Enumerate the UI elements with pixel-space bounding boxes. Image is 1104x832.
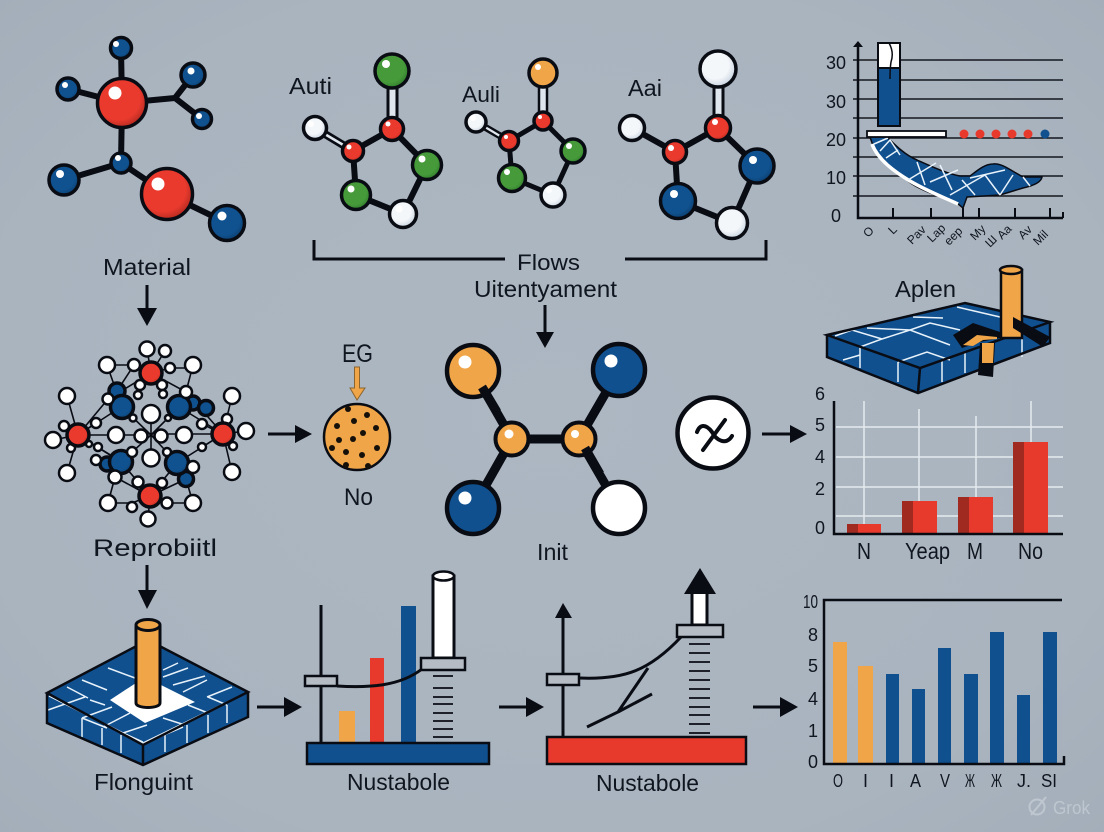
label: Aplen: Aplen — [895, 276, 956, 302]
label: Nustabole 2: Nustabole — [596, 770, 699, 796]
dots — [960, 130, 1050, 138]
icon: slab with pillar and clamps — [827, 266, 1050, 393]
label: Nustabole 1: Nustabole — [347, 769, 450, 795]
bracket — [314, 240, 766, 259]
x axis labels: N — [857, 538, 871, 564]
x axis labels: My — [967, 222, 988, 243]
y axis labels: 8 — [808, 625, 818, 645]
label: Init: Init — [537, 539, 569, 565]
molecule: material — [49, 38, 244, 240]
x axis labels: SI — [1041, 771, 1057, 791]
chart: red bars — [815, 384, 1063, 564]
y axis labels: 10 — [803, 592, 818, 612]
pillar — [136, 620, 160, 708]
arrow: orange down — [350, 367, 365, 400]
arrow: to chart 3 — [499, 697, 544, 717]
label: Aai: Aai — [628, 75, 662, 101]
bars — [847, 442, 1048, 534]
x axis labels: L — [885, 222, 900, 237]
x axis labels: Ж — [991, 771, 1002, 791]
x axis labels: M — [967, 538, 983, 564]
y axis labels: 20 — [826, 130, 846, 150]
x axis labels: O — [860, 224, 877, 240]
wave shape — [870, 137, 1042, 208]
y axis labels: 1 — [808, 721, 818, 741]
label: Flonguint: Flonguint — [94, 769, 194, 795]
y axis labels — [815, 384, 825, 538]
x axis labels: Lap — [924, 221, 949, 245]
icon: Flonguint slab and pillar — [47, 620, 248, 765]
x axis labels — [860, 221, 1051, 250]
y axis labels: 4 — [815, 447, 825, 467]
chart: bottom right bars — [803, 592, 1064, 791]
label: Uitentyament: Uitentyament — [474, 276, 618, 302]
y axis labels — [826, 53, 846, 226]
x axis labels: V — [940, 771, 950, 791]
label: Auti: Auti — [289, 73, 332, 99]
label: Auli: Auli — [462, 82, 500, 107]
y axis labels: 30 — [826, 53, 846, 73]
arrow: Reprobiitl down — [138, 565, 157, 609]
y axis labels: 5 — [815, 415, 825, 435]
arrow: to bar chart — [762, 425, 807, 443]
y axis labels: 6 — [815, 384, 825, 404]
x axis labels: Pav — [904, 223, 929, 247]
label: No: No — [344, 484, 373, 511]
y axis labels — [803, 592, 818, 772]
watermark: Grok: Grok — [1053, 798, 1091, 818]
label: EG: EG — [342, 340, 373, 368]
arrow: material down — [137, 285, 157, 326]
x axis labels: A — [910, 771, 921, 791]
x axis labels: I — [863, 771, 868, 791]
molecule: central — [447, 344, 645, 534]
x axis labels — [833, 771, 1057, 791]
x axis labels: No — [1018, 538, 1043, 564]
label: Flows: Flows — [517, 250, 580, 275]
y axis labels: 10 — [826, 168, 846, 188]
clamps — [953, 317, 1050, 377]
y axis labels: 4 — [808, 689, 818, 709]
x axis labels: I — [889, 771, 894, 791]
x axis labels — [857, 538, 1043, 564]
apparatus: Nustabole blue — [305, 572, 489, 764]
x axis labels: Ш — [982, 232, 1000, 250]
y axis labels: 5 — [808, 656, 818, 676]
x axis labels: eep — [941, 224, 966, 248]
y axis labels: 30 — [826, 92, 846, 112]
y axis labels: 2 — [815, 479, 825, 499]
y axis labels: 0 — [808, 752, 818, 772]
x axis labels: Ж — [965, 771, 975, 791]
white plank — [867, 131, 946, 137]
bars — [833, 632, 1057, 764]
molecule: Aai — [620, 51, 774, 238]
x axis labels: Aa — [994, 222, 1015, 242]
x axis labels: Yeap — [905, 538, 950, 564]
x axis labels: Av — [1015, 222, 1035, 242]
x axis labels: O — [833, 771, 843, 791]
arrow: cluster to particle — [268, 425, 312, 443]
label: Reprobiitl: Reprobiitl — [93, 535, 217, 562]
apparatus: Nustabole red — [547, 568, 746, 764]
arrow: to chart 2 — [257, 697, 302, 717]
label: Material: Material — [103, 254, 191, 280]
x axis labels: J. — [1017, 771, 1031, 791]
y axis labels: 0 — [831, 206, 841, 226]
x axis labels: Mil — [1030, 227, 1051, 248]
chart: top right — [826, 41, 1063, 250]
icon: not-similar circle — [678, 398, 748, 468]
molecule: Auti — [304, 54, 442, 228]
cluster: Reprobiitl network — [45, 342, 254, 526]
bar: tall blue and white — [878, 43, 900, 126]
molecule: Auli — [466, 59, 585, 207]
arrow: to central molecule — [536, 305, 554, 348]
y axis labels: 0 — [815, 518, 825, 538]
arrow: to chart 4 — [753, 697, 798, 717]
pillar — [1000, 266, 1022, 338]
watermark: Grok — [1030, 797, 1091, 818]
icon: porous particle — [324, 404, 390, 470]
